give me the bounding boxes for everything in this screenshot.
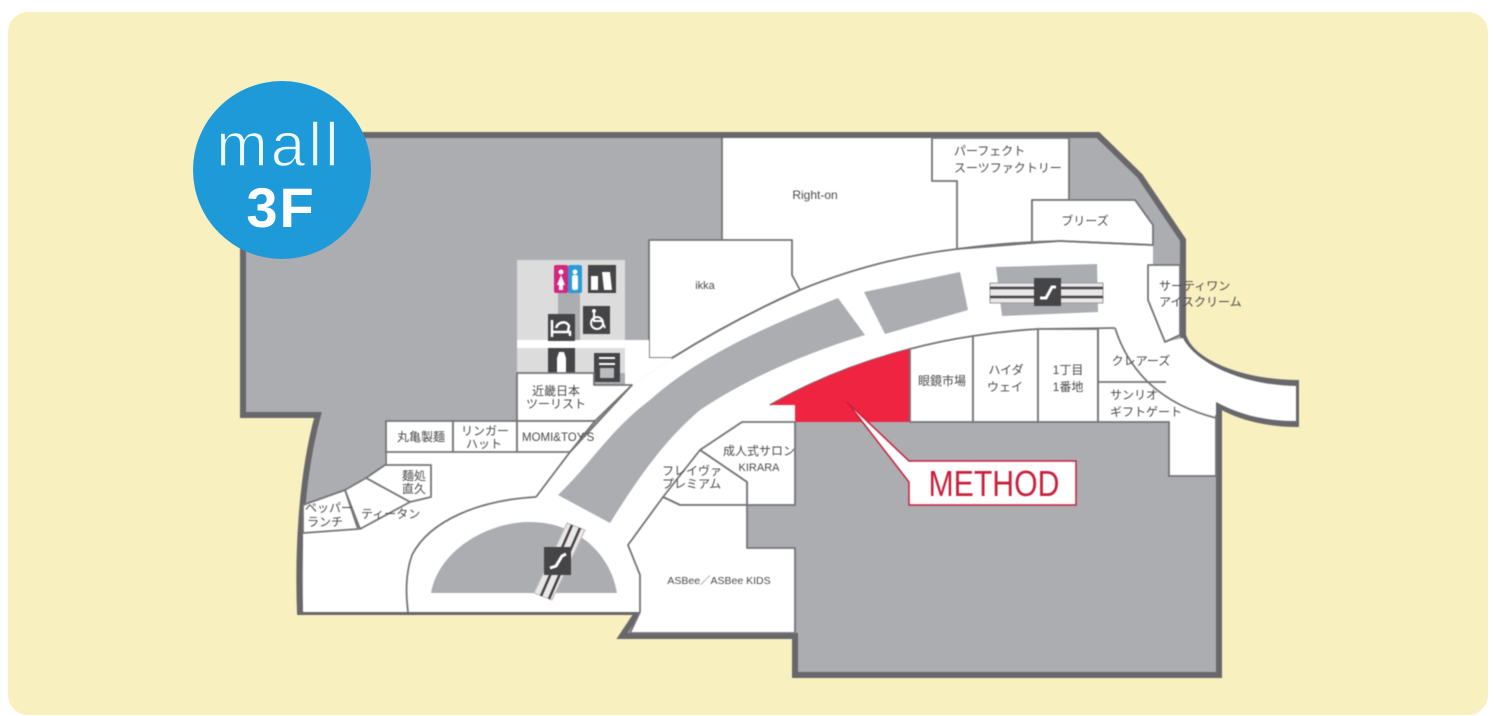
store: Claire's [1098,328,1216,422]
store: Kinki Nippon Tourist: ツーリスト [526,397,586,411]
store: Marugame Seimen: 丸亀製麺 [397,430,445,444]
store: Right-on: Right-on [792,188,838,202]
badge: mall 3F [193,81,371,259]
store: T.G.I: ティータン [361,507,420,521]
void: middle atrium [864,272,968,334]
icon: wheelchair [583,306,610,334]
store: Sanrio Gift Gate [1098,388,1216,476]
store: KIRARA: KIRARA [739,462,780,474]
store: Hydeaway: ウェイ [987,380,1023,394]
store: MOMI&TOY'S [517,421,595,452]
building outline [243,135,1296,675]
store: 1-chome 1-banchi: 1番地 [1053,380,1083,394]
corridor upper edge [672,241,1153,358]
store: ikka [649,240,800,358]
store: Menjo Naokyu [366,465,431,502]
escalator: lower [534,523,585,600]
icon: baby changing [548,314,575,341]
main corridor [303,241,1296,612]
badge: mall 3F: mall [216,111,342,180]
store: ASBee [628,497,795,633]
corridor lower edge [770,328,1115,405]
store: Gankyo Ichiba: 眼鏡市場 [918,374,966,388]
store: Flavor Premium [662,450,747,505]
food court stores [303,465,431,533]
store: Baskin Robbins [1148,265,1242,342]
icon: restroom [554,265,582,293]
store: MOMI&TOY'S: MOMI&TOY'S [522,432,595,444]
store: Baskin Robbins: アイスクリーム [1159,295,1242,309]
store: ASBee: ASBee／ASBee KIDS [667,575,771,587]
store: Flavor Premium: プレミアム [662,477,721,491]
ring corridor inner void [431,522,617,593]
store: Hydeaway [973,329,1038,422]
store: Pepper Lunch: ランチ [307,515,343,529]
store: Menjo Naokyu: 直久 [402,481,426,496]
store: Kinki Nippon Tourist [517,373,632,421]
void: escalator atrium [996,264,1098,316]
store: Ringer Hut: ハット [466,437,502,451]
store: Sanrio Gift Gate: サンリオ [1110,388,1158,402]
store: Marugame Seimen [386,421,453,452]
store: Pepper Lunch: ペッパー [305,501,353,515]
icon: nursing room [588,265,616,293]
store: Baskin Robbins: サーティワン [1159,279,1230,293]
callout: METHOD [847,402,1076,505]
store: ikka: ikka [695,280,716,292]
store: Hydeaway: ハイダ [988,362,1024,377]
store: Perfect Suit Factory: パーフェクト [954,144,1025,158]
corridor upper-left edge [386,385,632,497]
store: Kinki Nippon Tourist: 近畿日本 [532,384,580,398]
store: Pepper Lunch [303,490,358,533]
escalator: upper [990,278,1103,306]
store: Breeze: ブリーズ [1061,213,1109,228]
store: Breeze [1032,200,1153,245]
store: KIRARA [700,422,795,505]
restroom block [517,260,625,382]
callout: METHOD: METHOD [928,463,1060,504]
store: 1-chome 1-banchi [1038,329,1098,422]
icon: baby bottle [548,348,575,374]
store: Perfect Suit Factory [932,138,1069,249]
store: Ringer Hut: リンガー [461,424,509,438]
store: Flavor Premium: フレイヴァ [662,463,722,478]
store: KIRARA: 成人式サロン [723,444,795,458]
badge: mall 3F: 3F [246,176,316,239]
store: Gankyo Ichiba [910,336,973,422]
void: long atrium [558,298,865,523]
store: METHOD highlighted [770,349,910,422]
store: 1-chome 1-banchi: 1丁目 [1053,363,1083,377]
store: Sanrio Gift Gate: ギフトゲート [1110,405,1182,419]
icon: elevator [594,353,620,382]
store: Right-on [722,138,957,295]
ring corridor outer edge [407,497,536,612]
store: Claire's: クレアーズ [1112,353,1170,368]
floor map [243,135,1296,675]
store: Perfect Suit Factory: スーツファクトリー [954,161,1062,175]
white passage [517,340,672,385]
store: Ringer Hut [453,421,517,452]
store: Menjo Naokyu: 麺処 [402,469,426,483]
